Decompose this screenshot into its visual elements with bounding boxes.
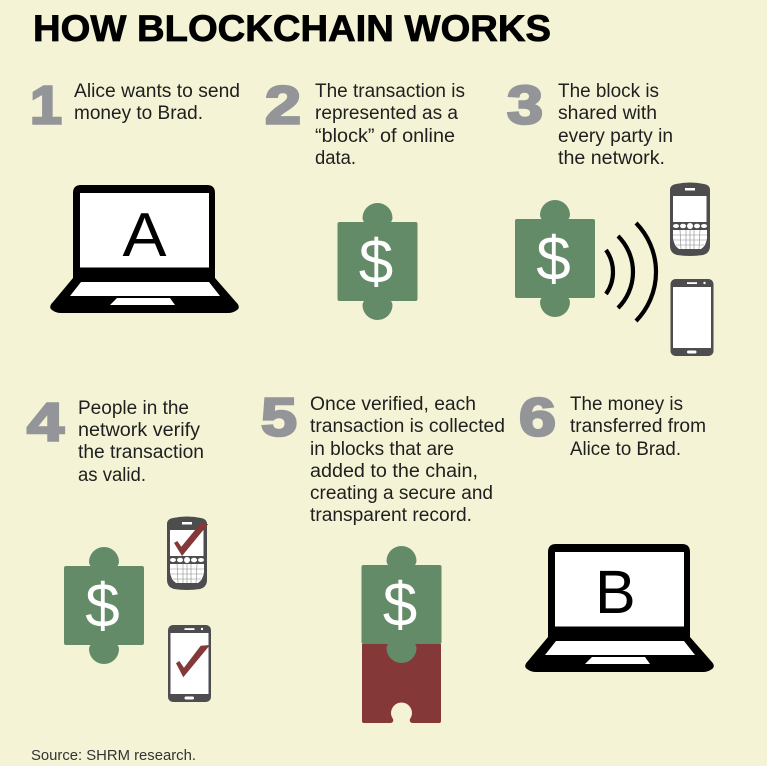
title: HOW BLOCKCHAIN WORKS [33,8,551,49]
step number 4: 4 [27,392,64,452]
step 2 text: The transaction is [315,81,465,102]
step number 1: 1 [30,76,62,136]
step 5 text: transaction is collected [310,416,505,437]
icon: signal waves [606,223,656,321]
step 1 text [74,81,240,124]
step number 3: 3 [507,76,543,136]
icon: red and green chained blocks: $ [383,571,417,640]
icon: green dollar block: $ [85,572,120,641]
step 5 text: transparent record. [310,505,472,526]
step 3 text: The block is [558,81,659,102]
step 2 text: “block” of online [315,126,455,147]
step 6 text: The money is [570,394,683,415]
icon: red and green chained blocks [362,546,442,723]
step 1 text: Alice wants to send [74,81,240,102]
panel: step 3 [507,76,714,356]
step 5 text: creating a secure and [310,483,493,504]
step 5 text: added to the chain, [310,461,478,482]
step 6 text [570,394,706,460]
step 2 text: represented as a [315,103,458,124]
icon: keypad phone [670,182,710,256]
source note: Source: SHRM research. [31,747,196,764]
step 6 text: transferred from [570,416,706,437]
icon: green dollar block: $ [359,228,393,297]
step number 2: 2 [265,76,301,136]
step 1 text: money to Brad. [74,103,203,124]
step 6 text: Alice to Brad. [570,439,681,460]
icon: green dollar block [515,200,595,317]
icon: touchscreen phone with check [168,625,211,702]
step number 5: 5 [261,388,297,448]
icon: laptop B [525,544,714,672]
icon: green dollar block [64,547,144,664]
step 5 text [310,394,505,526]
step 5 text: in blocks that are [310,439,454,460]
step 4 text: the transaction [78,442,204,463]
icon: green dollar block [338,203,418,320]
panel: step 4 [27,392,211,702]
icon: laptop B: B [595,558,636,626]
step 3 text: every party in [558,126,673,147]
step 4 text: as valid. [78,465,146,486]
step 4 text: People in the [78,398,189,419]
step 3 text: the network. [558,148,665,169]
step 3 text [558,81,673,169]
icon: green dollar block: $ [536,225,571,294]
step 2 text [315,81,465,169]
panel: step 1 [30,76,240,313]
step 5 text: Once verified, each [310,394,476,415]
step 3 text: shared with [558,103,657,124]
step 2 text: data. [315,148,356,169]
icon: laptop A: A [122,201,167,270]
step 4 text: network verify [78,420,201,441]
icon: touchscreen phone [670,279,714,356]
step number 6: 6 [519,388,556,448]
icon: keypad phone with check [167,516,208,590]
icon: laptop A [50,185,239,313]
panel: step 5 [261,388,505,723]
panel: step 6 [519,388,714,672]
step 4 text [78,398,204,486]
panel: step 2 [265,76,465,320]
